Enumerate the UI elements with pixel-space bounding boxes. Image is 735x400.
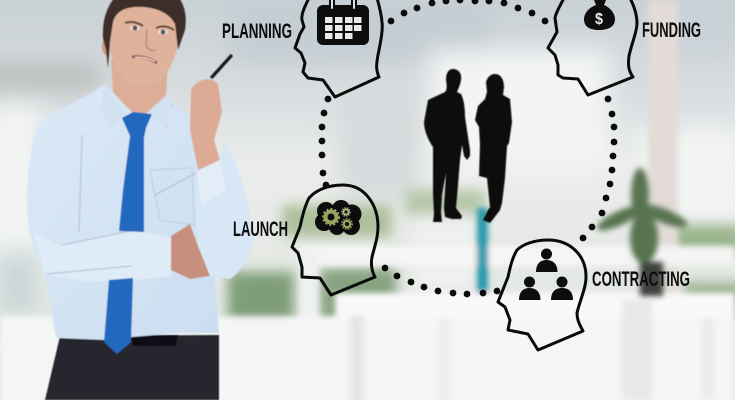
panel: contracting	[498, 240, 690, 350]
hand on arm	[171, 224, 210, 279]
head outline: contracting	[498, 240, 586, 350]
ear	[102, 37, 110, 55]
shirt body	[27, 84, 222, 340]
panel: funding	[548, 0, 701, 95]
neck	[111, 60, 168, 120]
dotted ring connecting the heads	[319, 0, 617, 297]
icon: money bag	[584, 0, 615, 30]
nose and mouth	[132, 30, 157, 63]
pen	[212, 56, 231, 77]
icon: money bag: $	[595, 11, 603, 28]
panel: launch	[233, 185, 378, 295]
hair	[103, 0, 186, 68]
crossed forearm	[33, 230, 172, 282]
icon: calendar	[317, 0, 369, 45]
head outline: launch	[292, 185, 378, 295]
heading: launch: LAUNCH	[233, 218, 288, 241]
raised hand	[190, 79, 222, 170]
face	[107, 4, 181, 86]
icon: gears in brain cloud	[315, 200, 362, 235]
trousers	[45, 335, 219, 400]
businessman silhouette	[424, 69, 470, 222]
businesswoman silhouette	[475, 74, 512, 223]
panel: planning	[222, 0, 382, 97]
central silhouettes: businessman and businesswoman	[424, 69, 512, 223]
sleeve fold shading	[46, 104, 198, 274]
cuff	[196, 160, 226, 205]
tie	[104, 112, 152, 354]
right sleeve	[196, 142, 254, 279]
head outline: funding	[548, 0, 637, 95]
eyes and brows	[125, 22, 174, 34]
belt	[130, 335, 178, 346]
heading: funding: FUNDING	[642, 19, 701, 42]
collar	[101, 83, 172, 128]
icon: three people	[519, 248, 573, 300]
heading: planning: PLANNING	[222, 20, 292, 43]
head outline: planning	[295, 0, 382, 97]
man in blue shirt and tie	[27, 0, 254, 400]
